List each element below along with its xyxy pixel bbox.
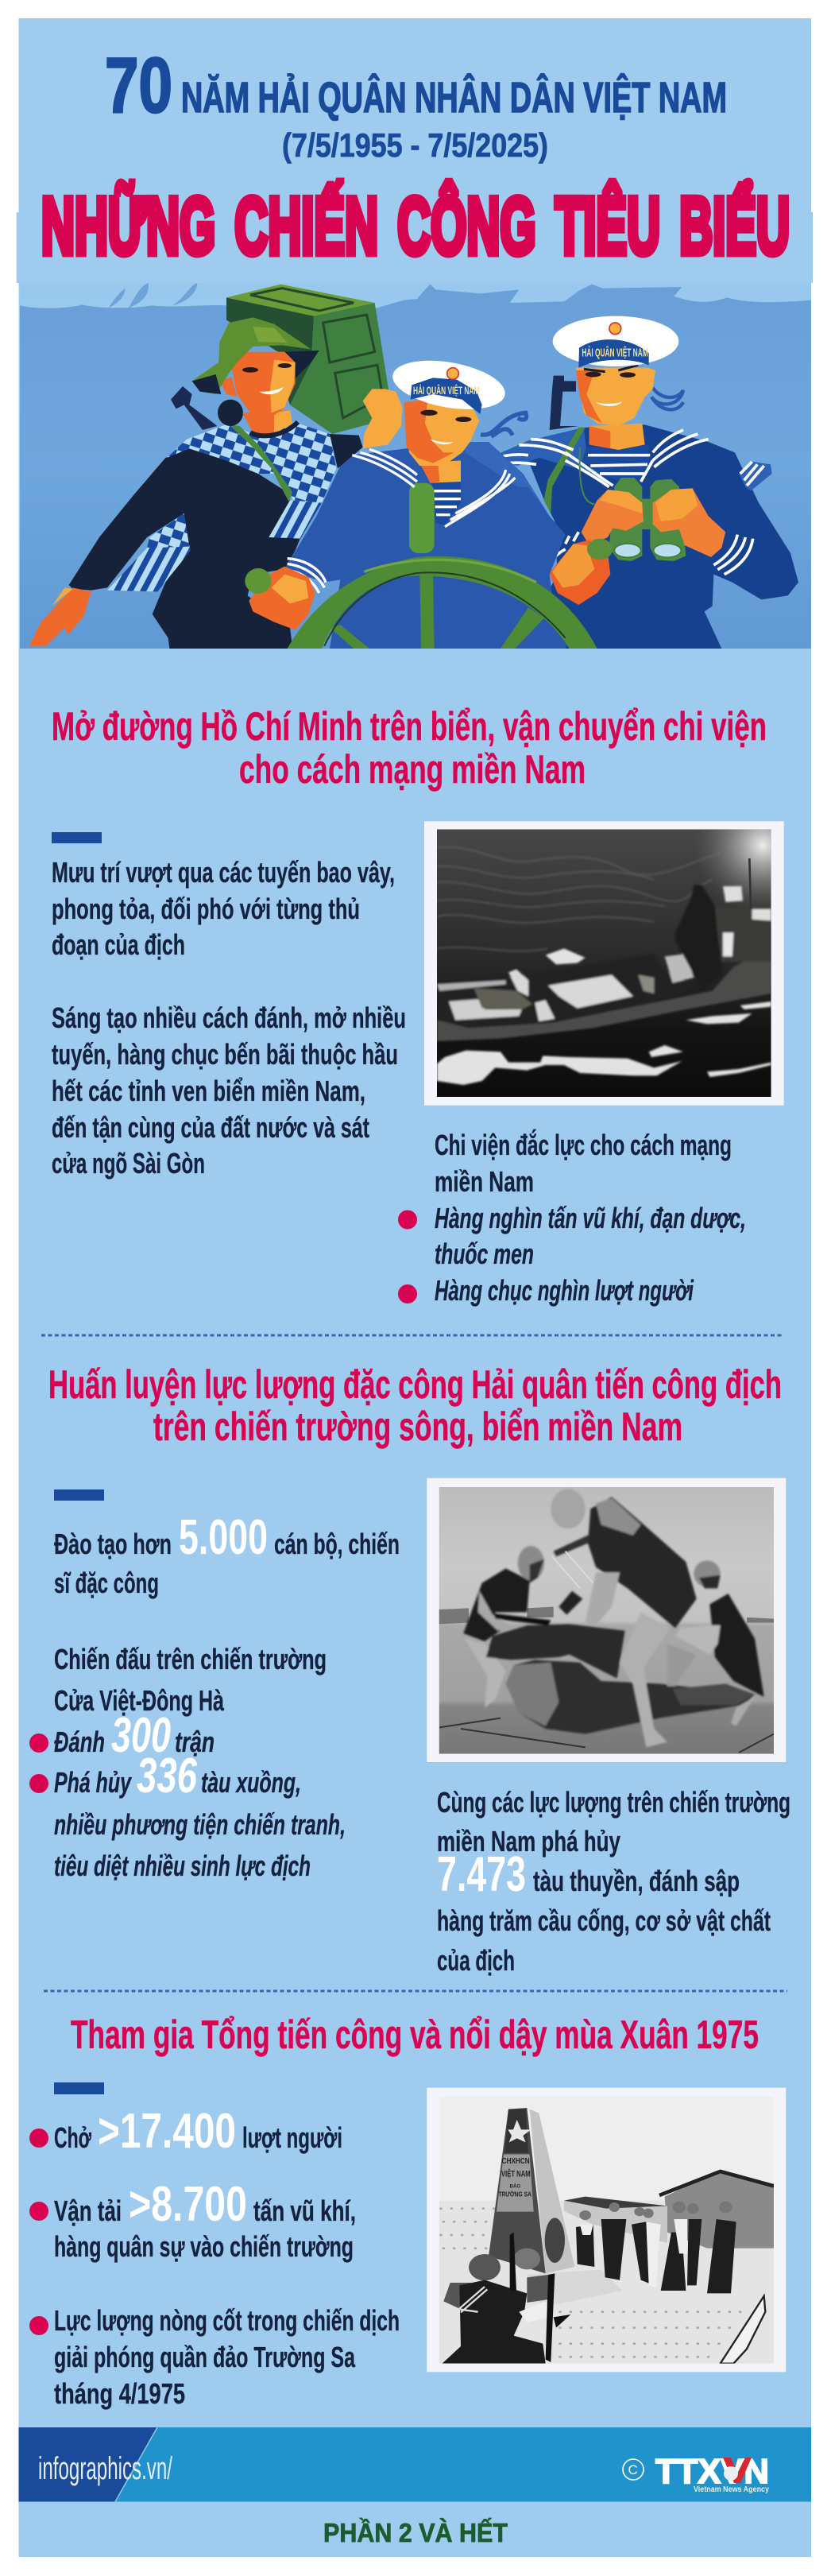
right text block: 7.473 [437, 1847, 526, 1902]
left text block: Cửa Việt-Đông Hà [54, 1684, 225, 1717]
left text block: >8.700 [129, 2177, 247, 2232]
left text block: đến tận cùng của đất nước và sát [52, 1111, 369, 1144]
left text block: cửa ngõ Sài Gòn [52, 1147, 205, 1180]
marker inscription: VIỆT NAM [501, 2169, 531, 2179]
website label: infographics.vn/ [38, 2451, 173, 2486]
copyright mark: C [628, 2462, 638, 2477]
left text block: tàu xuồng, [201, 1766, 301, 1799]
left text block: Sáng tạo nhiều cách đánh, mở nhiều [52, 1001, 406, 1034]
bullet [29, 2202, 48, 2221]
marker inscription: TRƯỜNG SA [498, 2190, 532, 2198]
left text block: 300 [111, 1708, 171, 1763]
raised hand [363, 389, 403, 448]
bullet [398, 1284, 417, 1303]
center sailor head and collar [388, 353, 550, 553]
left text block: tiêu diệt nhiều sinh lực địch [54, 1850, 311, 1882]
date range: (7/5/1955 - 7/5/2025) [282, 126, 548, 164]
bullet [29, 1774, 48, 1793]
center sailor head and collar: HẢI QUÂN VIỆT NAM [413, 383, 479, 397]
header titles [41, 41, 790, 271]
right sailor: HẢI QUÂN VIỆT NAM [582, 346, 648, 360]
right sailor [483, 316, 798, 649]
left text block: giải phóng quần đảo Trường Sa [54, 2341, 356, 2373]
center sailor body [284, 442, 576, 649]
right text block: của địch [437, 1944, 515, 1977]
left text block: Lực lượng nòng cốt trong chiến dịch [54, 2304, 400, 2337]
photo: cargo boat at sea [424, 821, 784, 1106]
right text block: Hàng chục nghìn lượt người [435, 1274, 694, 1307]
ship wheel [288, 556, 597, 649]
section 2: special forces training [29, 1362, 790, 1977]
bullet [29, 2316, 48, 2335]
left text block: sĩ đặc công [54, 1567, 159, 1599]
closing label: PHẦN 2 VÀ HẾT [323, 2518, 508, 2547]
collar stripes and cuff [288, 449, 417, 593]
bullet [29, 2129, 48, 2148]
marker inscription [498, 2157, 532, 2198]
left text block: phong tỏa, đối phó với từng thủ [52, 893, 360, 925]
left text block: hết các tỉnh ven biển miền Nam, [52, 1075, 365, 1107]
left text block: đoạn của địch [52, 928, 185, 961]
section 3: spring 1975 [29, 2012, 786, 2410]
section 1 heading [52, 704, 767, 792]
photo: divers working on a mine [427, 1478, 786, 1762]
ammunition box [226, 285, 389, 434]
left text block: 5.000 [179, 1510, 268, 1565]
right text block: tàu thuyền, đánh sập [533, 1865, 740, 1897]
left text block: tháng 4/1975 [54, 2377, 185, 2410]
accent bar [52, 832, 102, 843]
number 70: 70 [105, 41, 172, 129]
accent bar [54, 2082, 104, 2094]
left text block: Phá hủy [54, 1766, 132, 1799]
section 1: sea trail [52, 704, 784, 1307]
bullet [398, 1210, 417, 1229]
photo: Truong Sa sovereignty marker [427, 2088, 786, 2372]
left text block: Mưu trí vượt qua các tuyến bao vây, [52, 856, 395, 889]
left text block: Chiến đấu trên chiến trường [54, 1643, 327, 1675]
left text block [29, 1510, 400, 1882]
left text block: 336 [137, 1749, 197, 1803]
left text block: hàng quân sự vào chiến trường [54, 2230, 354, 2263]
left text block: trận [175, 1726, 215, 1758]
section 2 heading [48, 1362, 782, 1449]
left text block: >17.400 [98, 2104, 236, 2159]
right text block: miền Nam [435, 1165, 534, 1198]
footer dark slanted block [19, 2427, 157, 2502]
TTXVN logo: TTXVN [655, 2452, 769, 2491]
right text block [398, 1128, 746, 1307]
left text block: Vận tải [54, 2194, 122, 2227]
title band [17, 212, 813, 283]
TTXVN logo: Vietnam News Agency [694, 2485, 769, 2494]
left text block: lượt người [242, 2121, 342, 2154]
marker inscription: CHXHCN [502, 2157, 530, 2166]
footer band [19, 2427, 811, 2502]
left text block: Đào tạo hơn [54, 1528, 172, 1560]
woman with scarf [29, 317, 363, 649]
left text block: tấn vũ khí, [253, 2194, 356, 2227]
right text block: thuốc men [435, 1238, 534, 1270]
copyright mark [623, 2459, 644, 2480]
left text block: Chở [54, 2121, 91, 2154]
bullet [29, 1733, 48, 1753]
right text block [437, 1786, 790, 1977]
left text block [52, 856, 406, 1180]
marker inscription: ĐẢO [510, 2183, 520, 2190]
right text block: miền Nam phá hủy [437, 1825, 620, 1857]
left text block: Đánh [54, 1726, 105, 1758]
fist on wheel [245, 567, 315, 630]
left text block: tuyến, hàng chục bến bãi thuộc hầu [52, 1038, 398, 1071]
accent bar [54, 1489, 104, 1501]
section 1 heading: cho cách mạng miền Nam [239, 747, 586, 792]
left text block: cán bộ, chiến [274, 1528, 400, 1560]
left text block: nhiều phương tiện chiến tranh, [54, 1808, 346, 1841]
left text block [29, 2104, 400, 2410]
hero illustration: three navy figures [20, 283, 811, 649]
